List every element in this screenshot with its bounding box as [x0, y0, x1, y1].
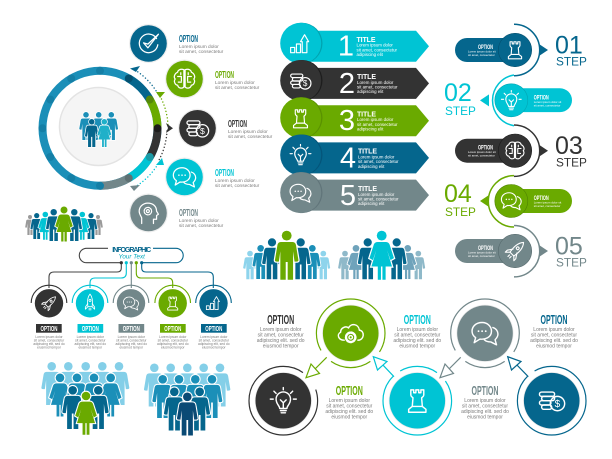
- step 03: OPTION: [478, 145, 493, 152]
- node 1: eiusmod tempor: [37, 346, 62, 350]
- option text 5: OPTION: [179, 208, 198, 219]
- row 1: Lorem ipsum dolor: [356, 43, 393, 48]
- text: blue option: OPTION: [540, 313, 568, 327]
- text: grey option: eiusmod tempor: [467, 414, 503, 420]
- node 5: [196, 285, 231, 350]
- step 04: STEP: [445, 205, 476, 219]
- step 05: 05: [555, 232, 583, 260]
- node 2: [72, 285, 108, 350]
- option text 1: [179, 34, 224, 55]
- step 04: sit amet, consectetur: [534, 204, 560, 208]
- row 3: sit amet, consectetur: [357, 122, 398, 127]
- option text 2: sit amet, consectetur: [215, 85, 260, 91]
- text: green option: OPTION: [336, 384, 363, 398]
- option circle: coins: [178, 109, 217, 148]
- row 4: TITLE: [358, 149, 377, 156]
- row 2: 2: [339, 68, 355, 100]
- step 03: [455, 125, 587, 176]
- text: teal option: adipiscing elit. sed do: [393, 338, 441, 344]
- arrowheads: [130, 66, 173, 191]
- step 02: OPTION: [534, 94, 549, 102]
- row 5: 5: [340, 180, 356, 212]
- arrow: green to dark: [306, 357, 327, 378]
- text: teal option: eiusmod tempor: [399, 344, 436, 350]
- text: grey option: OPTION: [472, 384, 498, 398]
- ring segments: [100, 78, 158, 186]
- option text 3: OPTION: [228, 119, 247, 130]
- option circle: brain: [165, 60, 204, 98]
- row 1: [280, 23, 429, 64]
- option text 2: OPTION: [215, 70, 234, 81]
- inner disc: [60, 88, 138, 166]
- bracket: [79, 248, 183, 263]
- step 04: 04: [444, 180, 472, 208]
- step 01: 01: [555, 31, 583, 59]
- node 5: eiusmod tempor: [202, 346, 227, 350]
- text: teal option: Lorem ipsum dolor: [397, 327, 438, 333]
- step 02: [444, 75, 572, 126]
- row 3: 3: [339, 105, 355, 137]
- row 2: adipiscing elit: [357, 89, 384, 94]
- center people: [79, 112, 118, 147]
- node 2: OPTION: [82, 324, 99, 333]
- option text 4: Lorem ipsum dolor: [215, 178, 255, 184]
- row 2: TITLE: [357, 74, 376, 81]
- step 03: sit amet, consectetur: [468, 154, 495, 158]
- node 1: [31, 285, 67, 350]
- option text 1: sit amet, consectetur: [179, 49, 224, 55]
- option text 3: sit amet, consectetur: [228, 134, 273, 140]
- text: green option: sit amet, consectetur: [326, 403, 373, 409]
- node: teal rook: [383, 366, 452, 435]
- crowd: green man: [243, 231, 330, 280]
- step 02: 02: [444, 79, 472, 107]
- step 02: Lorem ipsum dolor sit: [534, 100, 562, 104]
- node 2: adipiscing elit, sed do: [75, 342, 106, 346]
- option text 3: [228, 119, 273, 140]
- ring nodes: [38, 67, 162, 190]
- node 5: Lorem ipsum dolor: [200, 335, 228, 339]
- option text 1: Lorem ipsum dolor: [179, 44, 219, 50]
- text: blue option: [530, 313, 578, 350]
- row 4: sit amet, consectetur: [358, 159, 399, 164]
- step 04: Lorem ipsum dolor sit: [534, 200, 562, 204]
- text: teal option: OPTION: [404, 313, 431, 327]
- node 3: sit amet, consectetur: [116, 338, 147, 342]
- step 04: [444, 176, 572, 227]
- node 2: sit amet, consectetur: [75, 338, 106, 342]
- node 4: Lorem ipsum dolor: [159, 335, 187, 339]
- step 04: OPTION: [534, 195, 549, 202]
- option text 5: [179, 208, 224, 229]
- text: green option: adipiscing elit. sed do: [325, 409, 373, 415]
- text: dark option: adipiscing elit. sed do: [257, 338, 305, 344]
- panel: cycle diagram: [249, 299, 586, 435]
- arrow: teal to green: [373, 357, 394, 377]
- step 03: 03: [555, 132, 583, 160]
- panel: ring diagram: [38, 24, 273, 232]
- node 4: [155, 285, 190, 350]
- node 4: OPTION: [164, 324, 181, 333]
- step 02: STEP: [445, 104, 476, 118]
- text: green option: [325, 384, 373, 420]
- crowd: green woman front: [41, 362, 129, 435]
- panel: steps: [444, 24, 587, 277]
- node 2: eiusmod tempor: [78, 346, 103, 350]
- row 1: adipiscing elit: [356, 52, 384, 57]
- outer ring: [42, 71, 158, 186]
- text: blue option: sit amet, consectetur: [531, 332, 577, 338]
- node 3: adipiscing elit, sed do: [116, 342, 147, 346]
- text: green option: eiusmod tempor: [331, 414, 368, 420]
- text: teal option: sit amet, consectetur: [394, 332, 441, 338]
- node 4: sit amet, consectetur: [158, 338, 189, 342]
- arrow: grey to teal: [440, 357, 461, 378]
- step 05: STEP: [556, 256, 587, 270]
- option circle: chat: [165, 158, 204, 196]
- node 3: eiusmod tempor: [119, 346, 144, 350]
- text: blue option: Lorem ipsum dolor: [533, 327, 575, 333]
- node 3: OPTION: [123, 324, 140, 333]
- step 01: OPTION: [478, 44, 493, 51]
- text: grey option: adipiscing elit. sed do: [461, 409, 509, 415]
- option text 4: OPTION: [215, 168, 234, 179]
- row 1: sit amet, consectetur: [356, 47, 398, 52]
- row 2: Lorem ipsum dolor: [357, 80, 394, 85]
- node 5: OPTION: [205, 324, 222, 333]
- step 05: [455, 226, 587, 277]
- node 1: Lorem ipsum dolor: [35, 335, 64, 339]
- step 01: Lorem ipsum dolor sit: [468, 50, 496, 54]
- row 2: sit amet, consectetur: [357, 85, 398, 90]
- text: grey option: [461, 384, 509, 420]
- node: grey chat: [451, 299, 519, 368]
- panel: tree diagram: [31, 247, 231, 350]
- node: dark bulb: [249, 366, 318, 435]
- node 2: Lorem ipsum dolor: [77, 335, 105, 339]
- text: green option: Lorem ipsum dolor: [329, 398, 370, 404]
- row 3: TITLE: [357, 112, 376, 118]
- arrow: blue to grey: [508, 357, 528, 377]
- row 2: [280, 60, 429, 101]
- crowd: teal woman: [338, 231, 425, 280]
- row 4: 4: [340, 142, 356, 174]
- node 4: adipiscing elit, sed do: [157, 342, 189, 346]
- small crowd: [25, 206, 103, 242]
- row 3: [280, 97, 429, 138]
- node 1: sit amet, consectetur: [34, 338, 65, 342]
- node: blue coins: [517, 366, 586, 435]
- step 01: [455, 24, 587, 76]
- step 05: Lorem ipsum dolor sit: [468, 250, 496, 254]
- heading: [112, 247, 151, 260]
- row 5: Lorem ipsum dolor: [358, 192, 395, 197]
- row 5: [280, 172, 429, 213]
- row 5: sit amet, consectetur: [358, 196, 399, 202]
- panel: numbered arrows: [280, 23, 429, 213]
- text: grey option: Lorem ipsum dolor: [464, 398, 506, 404]
- node 3: [113, 285, 149, 350]
- option text 5: Lorem ipsum dolor: [179, 218, 219, 224]
- step 01: sit amet, consectetur: [468, 53, 495, 57]
- row 3: Lorem ipsum dolor: [357, 117, 394, 122]
- text: teal option: [393, 313, 441, 350]
- row 4: adipiscing elit: [358, 164, 385, 169]
- option text 4: [215, 168, 260, 189]
- option text 1: OPTION: [179, 34, 198, 45]
- node 3: Lorem ipsum dolor: [118, 335, 146, 339]
- heading: INFOGRAPHIC: [112, 247, 151, 254]
- node 4: eiusmod tempor: [161, 346, 186, 350]
- text: dark option: OPTION: [267, 313, 294, 327]
- row 5: adipiscing elit: [358, 201, 385, 206]
- row 5: TITLE: [358, 186, 377, 193]
- row 3: adipiscing elit: [357, 126, 384, 132]
- option circle: head: [129, 194, 168, 232]
- text: dark option: sit amet, consectetur: [258, 332, 304, 338]
- node 5: sit amet, consectetur: [199, 338, 230, 342]
- text: dark option: eiusmod tempor: [263, 344, 299, 350]
- step 02: sit amet, consectetur: [534, 104, 560, 108]
- step 05: OPTION: [478, 245, 493, 252]
- node 1: OPTION: [40, 324, 58, 333]
- connectors: [49, 263, 213, 288]
- step 01: STEP: [556, 55, 587, 69]
- row 4: [280, 134, 429, 176]
- text: dark option: Lorem ipsum dolor: [260, 327, 302, 333]
- node 1: adipiscing elit, sed do: [33, 342, 65, 346]
- row 1: TITLE: [356, 37, 376, 44]
- heading: Your Text: [119, 253, 145, 260]
- step 05: sit amet, consectetur: [468, 254, 495, 258]
- row 4: Lorem ipsum dolor: [358, 154, 395, 160]
- option text 2: [215, 70, 260, 91]
- text: blue option: eiusmod tempor: [536, 344, 572, 350]
- option text 5: sit amet, consectetur: [179, 223, 224, 229]
- dotted arcs: [135, 70, 168, 187]
- row 1: 1: [338, 31, 354, 63]
- option text 4: sit amet, consectetur: [215, 183, 260, 189]
- node 5: adipiscing elit, sed do: [198, 342, 230, 346]
- option circle: check: [129, 24, 168, 63]
- option text 3: Lorem ipsum dolor: [228, 129, 268, 135]
- crowd: navy man front: [144, 364, 230, 436]
- step 03: Lorem ipsum dolor sit: [468, 150, 496, 154]
- option text 2: Lorem ipsum dolor: [215, 80, 255, 86]
- step 03: STEP: [556, 155, 587, 169]
- connector dots: [120, 261, 143, 264]
- text: dark option: [257, 313, 305, 350]
- node: green cloud: [316, 299, 385, 368]
- text: blue option: adipiscing elit. sed do: [530, 338, 578, 344]
- text: grey option: sit amet, consectetur: [462, 403, 508, 409]
